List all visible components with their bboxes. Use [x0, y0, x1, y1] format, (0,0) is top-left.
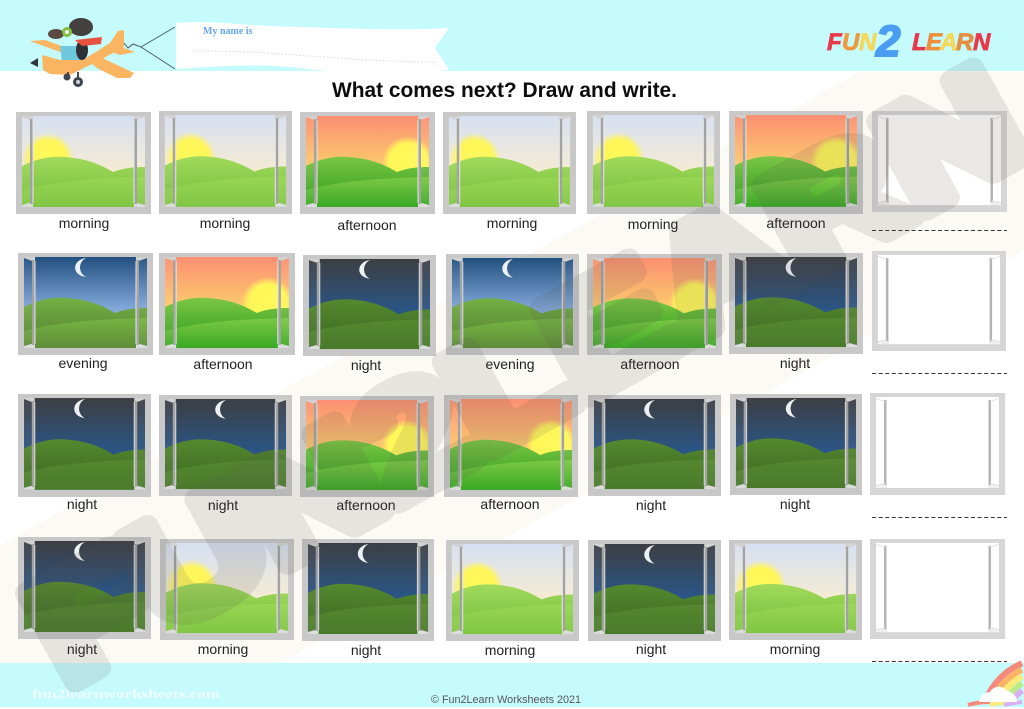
window: morning	[159, 111, 292, 214]
window: night	[303, 255, 436, 356]
name prompt: My name is	[203, 26, 253, 37]
window: afternoon	[729, 111, 863, 214]
answer line: row 2	[872, 372, 1007, 374]
window: afternoon	[300, 112, 435, 214]
icon: airplane with pilot	[30, 18, 135, 87]
window: night	[729, 253, 863, 354]
window: morning	[160, 539, 294, 640]
answer line: row 3	[872, 516, 1007, 518]
window: evening	[18, 253, 153, 355]
labels: row 2: afternoon	[620, 356, 680, 372]
panel: row 1 windows	[16, 111, 1007, 214]
window: morning	[729, 540, 862, 640]
window: blank answer	[872, 251, 1006, 351]
window: morning	[587, 111, 720, 214]
labels: row 3: afternoon	[336, 497, 396, 513]
window: morning	[16, 112, 151, 214]
watermark: FUN2LEARN: FUN2LEARN	[0, 33, 1024, 709]
labels: row 3: night	[780, 496, 810, 512]
labels: row 4: morning	[485, 642, 535, 658]
labels: row 2: night	[351, 357, 381, 373]
footer sky band	[0, 663, 1024, 707]
logo: Fun2Learn: R	[956, 29, 974, 56]
header sky band	[0, 0, 1024, 71]
labels: row 2: afternoon	[193, 356, 253, 372]
labels: row 1: morning	[200, 215, 250, 231]
name banner	[176, 22, 449, 73]
labels: row 4: night	[351, 642, 381, 658]
window: night	[18, 394, 151, 497]
window: afternoon	[444, 395, 578, 497]
labels: row 3: night	[67, 496, 97, 512]
logo: Fun2Learn: E	[926, 29, 943, 56]
logo: Fun2Learn: N	[973, 29, 991, 56]
labels: row 1	[59, 215, 826, 233]
title: What comes next? Draw and write.	[332, 79, 677, 102]
window: morning	[443, 112, 576, 214]
window: afternoon	[159, 253, 295, 355]
labels: row 4	[67, 641, 820, 658]
logo: Fun2Learn: A	[939, 29, 957, 56]
labels: row 2: night	[780, 355, 810, 371]
labels: row 1: morning	[487, 215, 537, 231]
labels: row 2: evening	[58, 355, 108, 371]
window: night	[588, 540, 721, 641]
labels: row 3: afternoon	[480, 496, 540, 512]
labels: row 2	[58, 355, 810, 373]
window: night	[730, 394, 862, 495]
labels: row 1: morning	[628, 216, 678, 232]
window: afternoon	[587, 254, 722, 355]
window: afternoon	[300, 396, 434, 497]
logo: Fun2Learn: U	[842, 29, 860, 56]
labels: row 4: night	[636, 641, 666, 657]
logo: Fun2Learn	[827, 17, 991, 66]
window: blank answer	[870, 393, 1005, 495]
icon: rainbow and cloud	[968, 663, 1022, 705]
labels: row 4: night	[67, 641, 97, 657]
window: night	[588, 395, 721, 496]
labels: row 3	[67, 496, 810, 513]
labels: row 2: evening	[485, 356, 535, 372]
logo: Fun2Learn: N	[859, 29, 877, 56]
logo: Fun2Learn: 2	[875, 17, 901, 66]
panel: row 3 windows	[18, 393, 1005, 497]
window: evening	[446, 254, 579, 355]
window: blank answer	[872, 111, 1007, 212]
tow lines	[124, 27, 175, 69]
window: night	[18, 537, 151, 639]
logo: Fun2Learn: L	[912, 29, 927, 56]
labels: row 3: night	[636, 497, 666, 513]
window: night	[302, 539, 434, 641]
logo: Fun2Learn: F	[827, 29, 843, 56]
window: morning	[446, 540, 579, 641]
website text: fun2learnworksheets.com	[32, 686, 220, 701]
panel: row 4 windows	[18, 537, 1005, 641]
labels: row 3: night	[208, 497, 238, 513]
labels: row 1: afternoon	[337, 217, 397, 233]
panel: row 2 windows	[18, 251, 1006, 356]
answer line: row 1	[872, 230, 1007, 232]
copyright: © Fun2Learn Worksheets 2021	[431, 694, 581, 706]
labels: row 1: afternoon	[766, 215, 826, 231]
labels: row 4: morning	[198, 641, 248, 657]
answer line: row 4	[872, 660, 1007, 662]
labels: row 1: morning	[59, 215, 109, 231]
labels: row 4: morning	[770, 641, 820, 657]
window: night	[159, 395, 292, 496]
window: blank answer	[870, 539, 1005, 639]
